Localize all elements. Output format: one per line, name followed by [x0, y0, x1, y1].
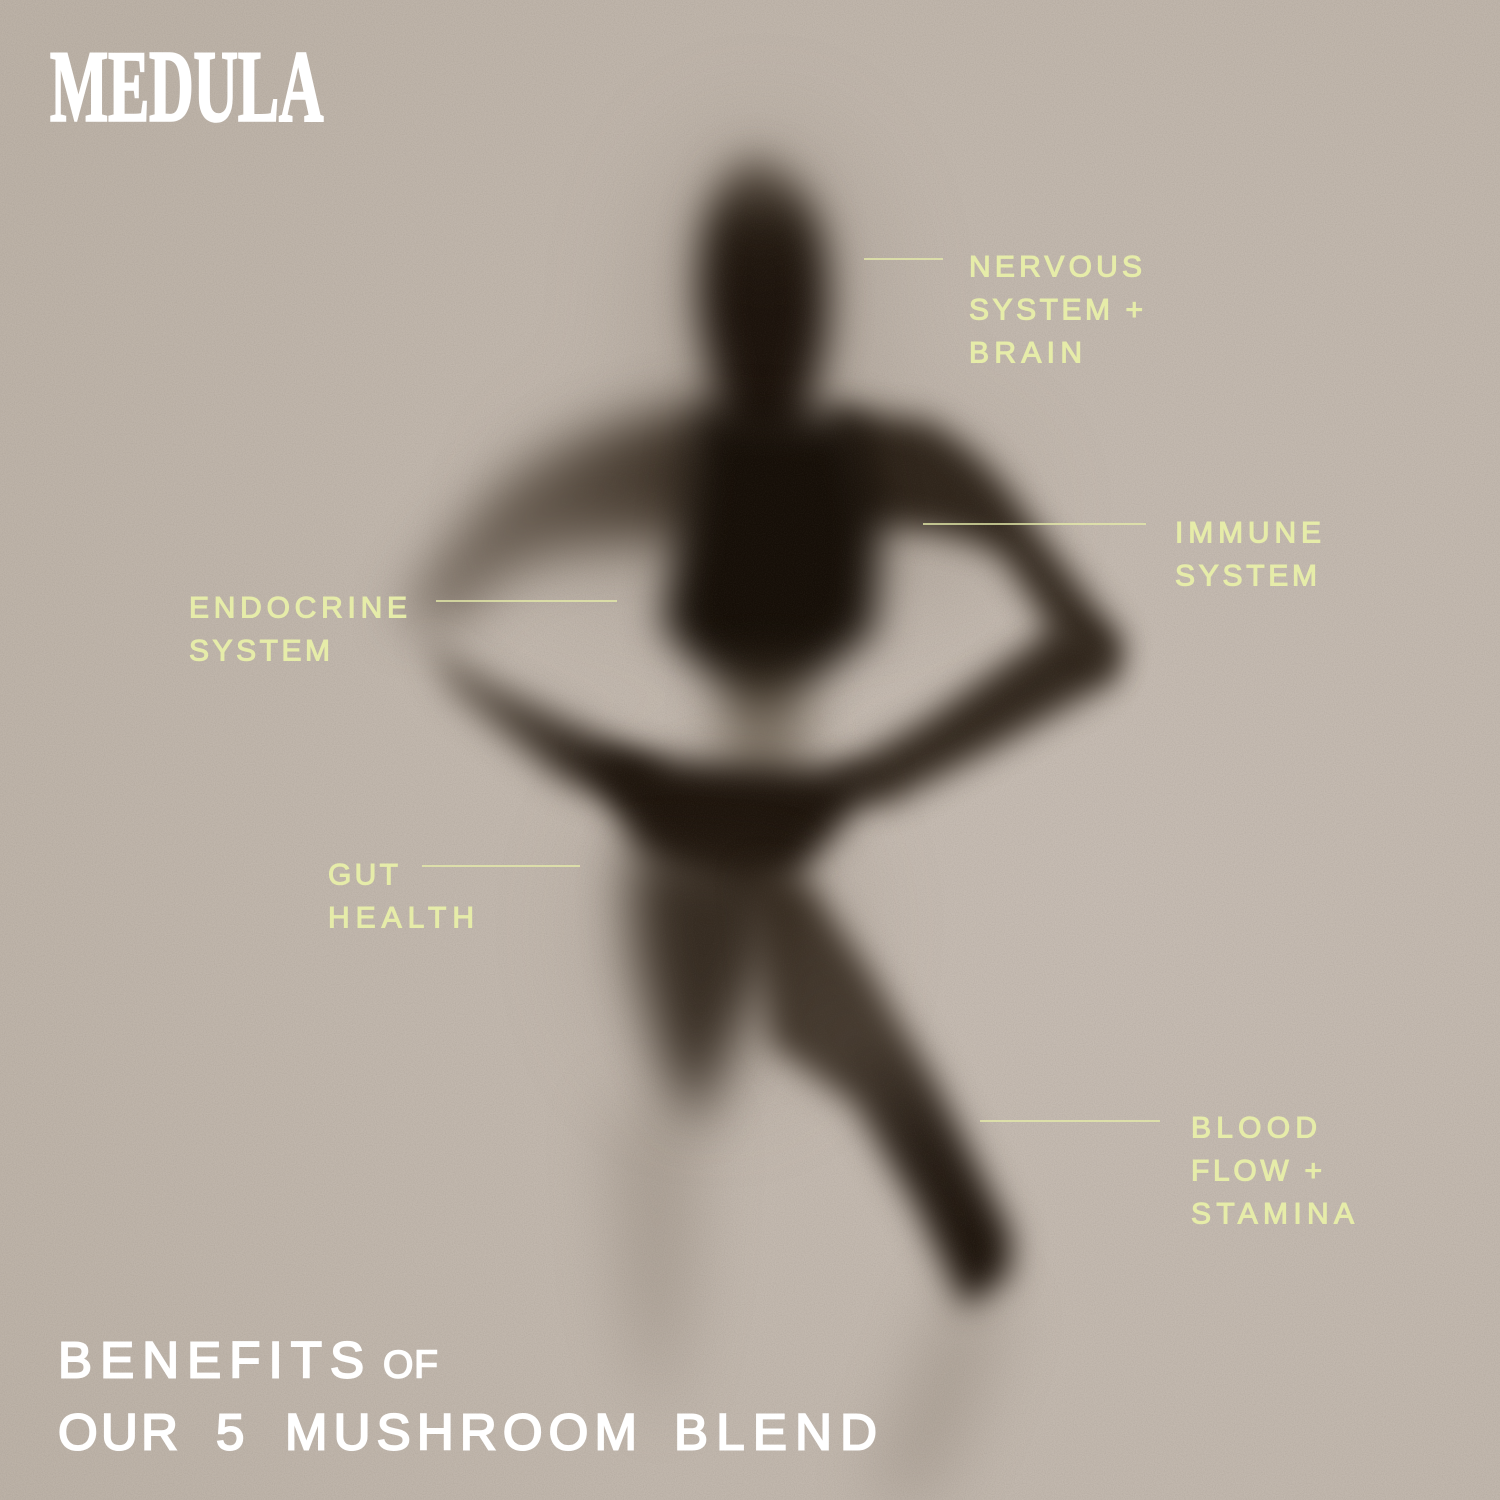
right arm	[830, 410, 1122, 682]
callout: gut health: HEALTH	[328, 902, 474, 934]
callout: nervous system + brain: SYSTEM +	[969, 294, 1143, 326]
title: OUR	[58, 1404, 178, 1460]
right leg	[750, 870, 1012, 1308]
callout: endocrine system	[189, 592, 617, 668]
callout: blood flow + stamina	[980, 1112, 1354, 1230]
title	[58, 1332, 877, 1460]
left arm (upper)	[400, 405, 720, 625]
logo: MEDULA: MEDULA	[50, 31, 324, 143]
title: BLEND	[674, 1404, 877, 1460]
left forearm	[420, 635, 665, 815]
callout: gut health	[328, 858, 580, 934]
callout: immune system	[923, 516, 1321, 592]
title: MUSHROOM	[285, 1404, 637, 1460]
callout: nervous system + brain: BRAIN	[969, 336, 1082, 370]
right forearm	[815, 622, 1118, 805]
faint lower legs	[610, 1100, 1005, 1500]
callout: blood flow + stamina: STAMINA	[1191, 1198, 1354, 1230]
callout: endocrine system: ENDOCRINE	[189, 592, 407, 624]
blurred silhouette figure	[400, 140, 1122, 1500]
callout: endocrine system: SYSTEM	[189, 634, 330, 668]
callout: nervous system + brain	[864, 250, 1143, 370]
left thigh	[630, 850, 790, 1130]
callout: blood flow + stamina: BLOOD	[1191, 1112, 1317, 1144]
waist	[722, 670, 808, 790]
callout: gut health: GUT	[328, 858, 398, 892]
title: 5	[216, 1404, 244, 1460]
title: OF	[383, 1344, 438, 1386]
title: BENEFITS	[58, 1332, 364, 1388]
callout: immune system: SYSTEM	[1175, 560, 1317, 592]
torso	[662, 410, 882, 712]
soft halo around figure	[530, 140, 1010, 1080]
callout: nervous system + brain: NERVOUS	[969, 250, 1142, 284]
pelvis	[590, 752, 885, 895]
callout: blood flow + stamina: FLOW +	[1191, 1154, 1322, 1188]
head and neck	[698, 155, 828, 450]
callout: immune system: IMMUNE	[1175, 516, 1321, 550]
